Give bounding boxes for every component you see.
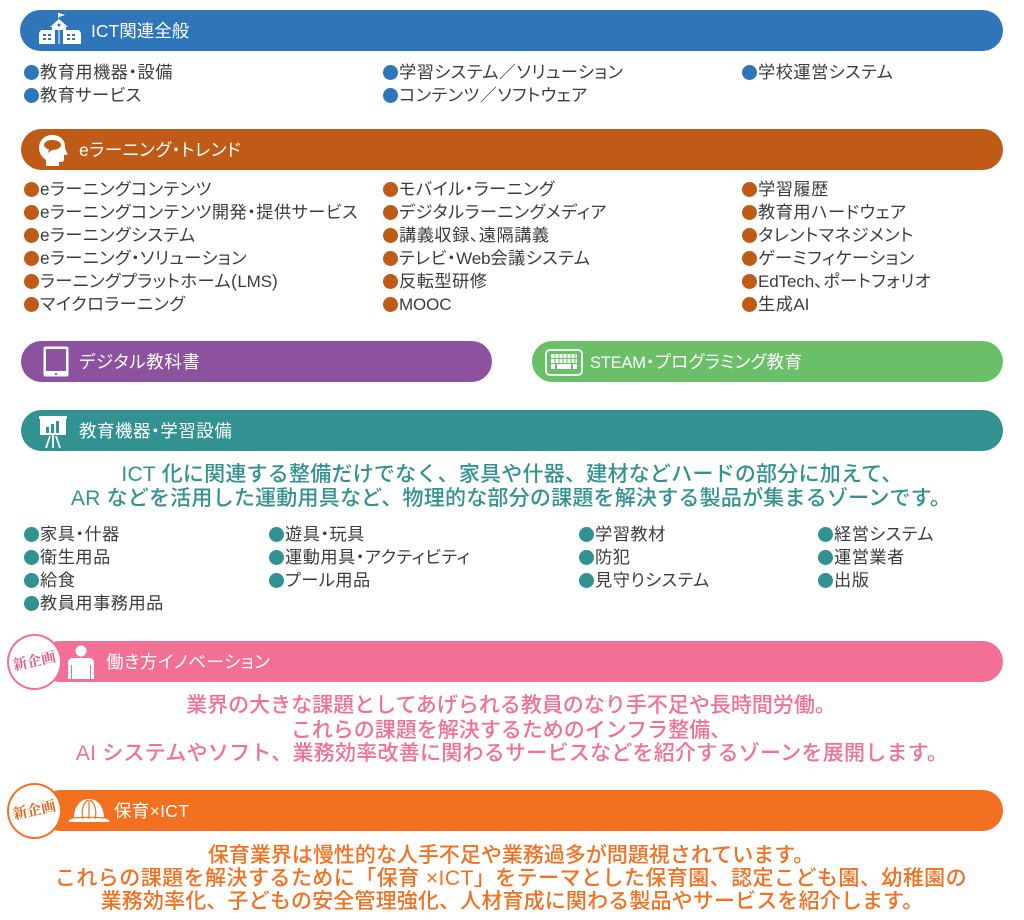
text: 反転型研修 [399,271,487,291]
text: 生成AI [758,294,809,314]
heading: 働き方イノベーション: 働き方イノベーション [106,652,270,672]
badge: 新企画 orange [7,783,62,839]
text: AR などを活用した運動用具など、物理的な部分の課題を解決する製品が集まるゾーンです。 [71,487,951,510]
icon: school building [39,13,81,44]
text: 教育用機器・設備 [40,62,173,82]
heading: ICT関連全般: ICT関連全般 [91,21,189,41]
text: テレビ・Web会議システム [399,248,590,268]
header bar: 教育機器・学習設備 [21,410,1003,451]
header bar: デジタル教科書 [21,341,492,382]
text: eラーニングシステム [40,225,196,245]
text: ラーニングプラットホーム(LMS) [40,271,278,291]
badge: 新企画 pink [7,634,62,690]
text: これらの課題を解決するためのインフラ整備、 [291,719,731,742]
text: eラーニングコンテンツ [40,179,212,199]
text: 運営業者 [834,547,905,567]
text: EdTech、ポートフォリオ [758,271,931,291]
header bar: STEAM・プログラミング教育 [532,341,1003,382]
text: コンテンツ／ソフトウェア [399,85,588,105]
icon: keyboard [545,349,583,376]
heading: STEAM・プログラミング教育: STEAM・プログラミング教育 [590,352,802,372]
text: eラーニング・ソリューション [40,248,247,268]
text block: 働き方 description [76,694,948,765]
text: 衛生用品 [40,547,111,567]
icon: person [68,646,94,679]
text: 経営システム [834,524,934,544]
text: マイクロラーニング [40,294,185,314]
text: eラーニングコンテンツ開発・提供サービス [40,202,358,222]
heading: 保育×ICT: 保育×ICT [114,801,189,821]
text: 教育用ハードウェア [758,202,907,222]
text block: 教育機器 description [71,463,951,510]
text: 学習教材 [595,524,666,544]
text: 講義収録、遠隔講義 [399,225,550,245]
text: MOOC [399,295,451,314]
text: 学校運営システム [758,62,893,82]
text: ICT 化に関連する整備だけでなく、家具や什器、建材などハードの部分に加えて、 [121,463,903,486]
header bar: eラーニング・トレンド [21,129,1003,170]
icon: safety hat [68,799,110,822]
text: 見守りシステム [595,570,710,590]
text: 業務効率化、子どもの安全管理強化、人材育成に関わる製品やサービスを紹介します。 [101,890,923,913]
text: 学習システム／ソリューション [399,62,623,82]
text: 学習履歴 [758,179,829,199]
badge: 新企画 orange: 新企画 [12,799,57,823]
text: ゲーミフィケーション [758,248,915,268]
text: 教員用事務用品 [40,593,164,613]
header bar: 保育×ICT [40,790,1003,831]
text: 遊具・玩具 [285,524,365,544]
text: 運動用具・アクティビティ [285,547,470,567]
heading: デジタル教科書: デジタル教科書 [79,352,201,372]
text: 家具・什器 [40,524,120,544]
text: プール用品 [285,570,371,590]
text: 保育業界は慢性的な人手不足や業務過多が問題視されています。 [208,844,814,867]
text: 防犯 [595,547,630,567]
text: タレントマネジメント [758,225,914,245]
text: これらの課題を解決するために「保育 ×ICT」をテーマとした保育園、認定こども園、幼稚園の [55,867,967,890]
text: モバイル・ラーニング [399,179,555,199]
text: 業界の大きな課題としてあげられる教員のなり手不足や長時間労働。 [186,694,836,717]
text: デジタルラーニングメディア [399,202,607,222]
icon: tablet [44,346,68,376]
header bar: 働き方イノベーション [40,641,1003,682]
icon: presentation board [39,416,67,448]
text: 出版 [834,570,869,590]
text block: 保育 description [55,844,967,913]
heading: 教育機器・学習設備: 教育機器・学習設備 [79,421,232,441]
header bar: ICT関連全般 [20,10,1003,51]
text: 教育サービス [40,85,142,105]
icon: head with speech bubble [39,135,68,166]
text: 給食 [40,570,75,590]
heading: eラーニング・トレンド: eラーニング・トレンド [79,140,241,160]
text: AI システムやソフト、業務効率改善に関わるサービスなどを紹介するゾーンを展開します。 [76,742,948,765]
badge: 新企画 pink: 新企画 [12,650,57,674]
